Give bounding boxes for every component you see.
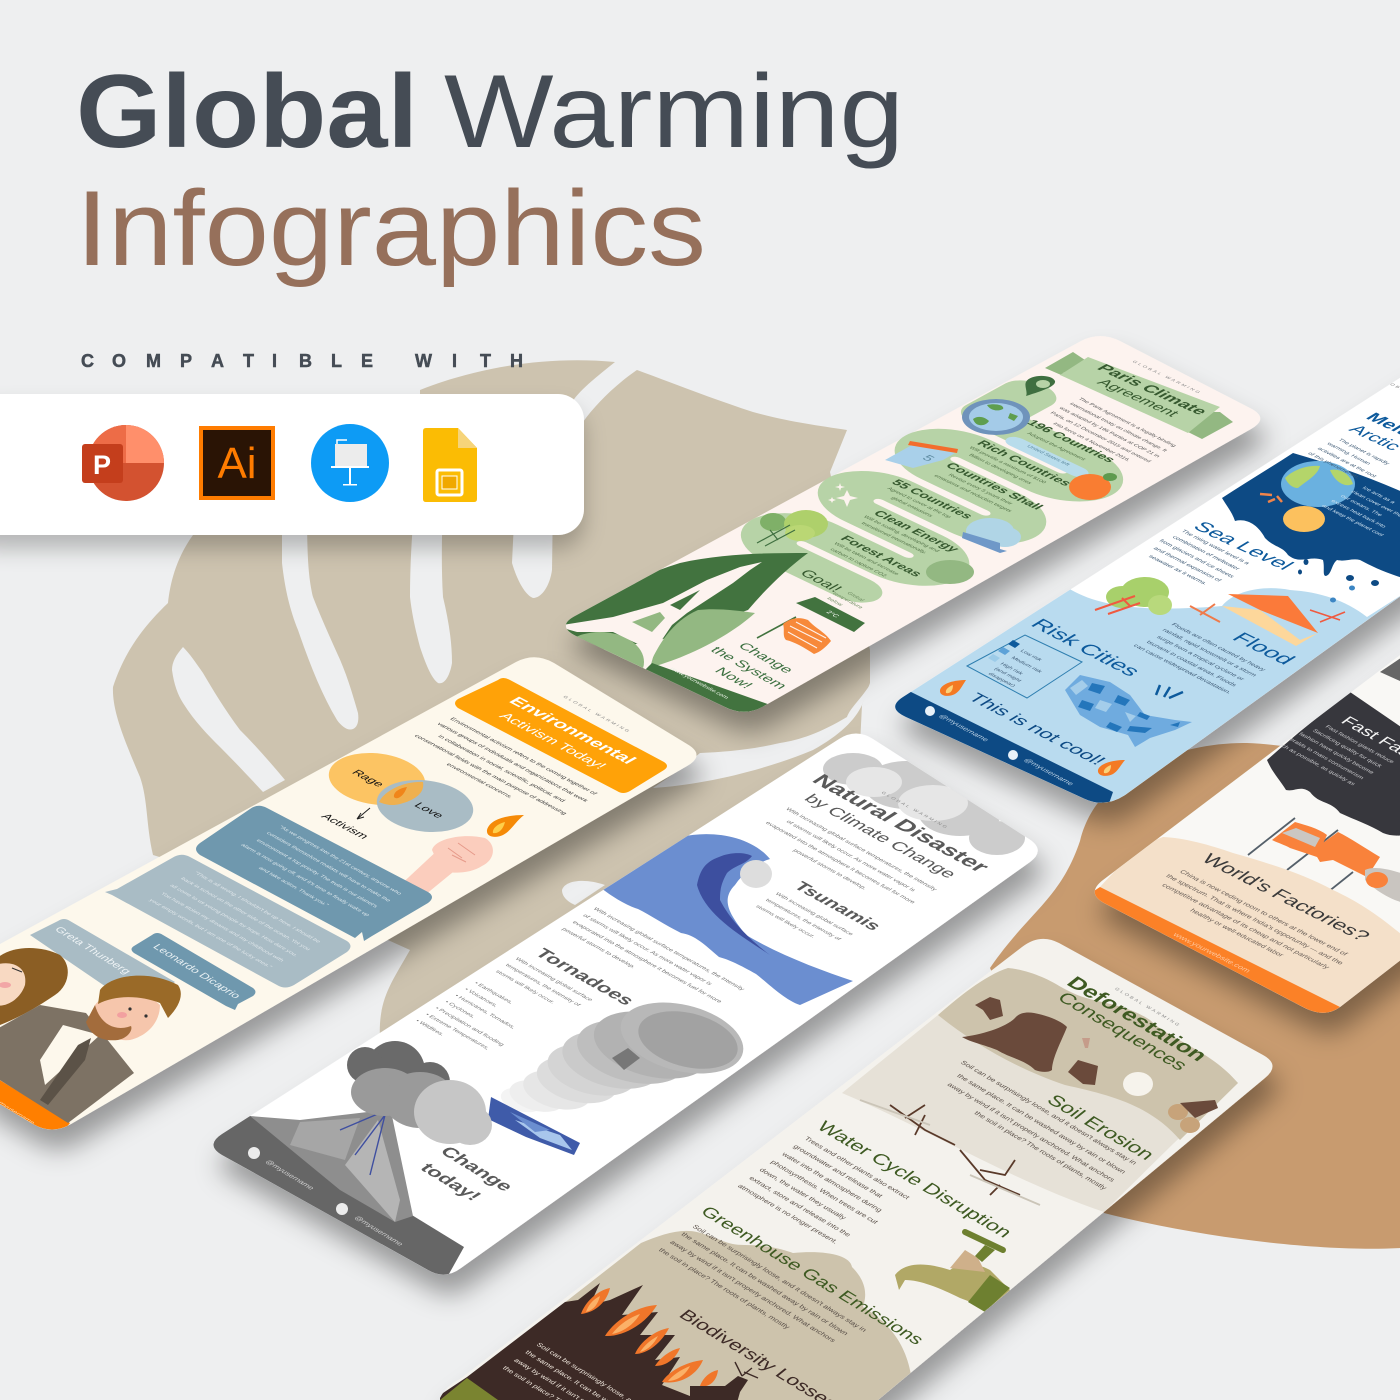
intro paragraph: The Paris Agreement is a legally binding bbox=[1076, 397, 1177, 448]
Risk Cities heading: Risk Cities bbox=[1026, 615, 1146, 679]
footer bar bbox=[895, 692, 1113, 803]
Tornadoes paragraph and list: • Volcanoes, bbox=[463, 988, 499, 1008]
Tsunamis heading: Tsunamis bbox=[790, 879, 886, 933]
2 degree banner: 2°C bbox=[824, 610, 841, 619]
quote bubble: Greta: You have stolen my dreams and my childhood with bbox=[159, 892, 285, 963]
title: Warming bbox=[444, 54, 904, 170]
Tornadoes paragraph and list: With increasing global surface bbox=[513, 957, 594, 1003]
Flood paragraph: tsunami in coastal areas. Floods bbox=[1145, 640, 1238, 688]
call to action: the System bbox=[707, 645, 790, 691]
quote bubble: Greta: all come to us young people for hope. How dare you. bbox=[168, 884, 299, 958]
section: Forest Areas: Forest Areas bbox=[837, 534, 926, 578]
pin icon bbox=[1025, 376, 1055, 396]
footer bar bbox=[1094, 887, 1340, 1013]
label: GLOBAL WARMING bbox=[1113, 987, 1182, 1028]
icon: waving orange flag bbox=[757, 617, 831, 654]
second paragraph: of storms will likely occur. As more water vapor is bbox=[581, 913, 714, 986]
Flood heading: Flood bbox=[1227, 629, 1301, 668]
Deforestation heading: Deforestation bbox=[1062, 973, 1213, 1065]
soil paragraph: Soil can be surprisingly loose, and it doesn't always stay in bbox=[959, 1060, 1138, 1166]
factories paragraph: healthy or well-educated labor bbox=[1188, 908, 1286, 958]
Environmental heading: Environmental bbox=[505, 694, 641, 766]
raised fist icon bbox=[395, 836, 493, 895]
greenhouse paragraph: away by wind if it isn't properly anchored. What anchors bbox=[668, 1239, 837, 1344]
tree icon bbox=[1095, 577, 1172, 615]
intro paragraph: various groups of individuals and organizations that work bbox=[435, 722, 590, 804]
decorative monstera leaf bbox=[113, 360, 871, 1040]
section: 196 Countries: United States left bbox=[1025, 444, 1071, 467]
section: Rich Countries: Will provide a minimum of $100 bbox=[967, 446, 1047, 484]
Natural Disaster heading: by Climate Change bbox=[800, 791, 961, 881]
footer bar bbox=[646, 663, 768, 712]
Sea Level heading: Sea Level bbox=[1188, 519, 1298, 573]
section: Goal: temperature bbox=[831, 592, 864, 610]
quote bubble: Greta bbox=[105, 855, 350, 988]
second paragraph: evaporated into the atmosphere it becomes fuel for more bbox=[570, 920, 724, 1004]
olive footer bbox=[440, 1378, 498, 1400]
dark blue melting shape bbox=[1222, 453, 1400, 583]
water paragraph: extract, store and release into the bbox=[747, 1175, 852, 1238]
Tsunamis paragraph: temperatures, the intensity of bbox=[764, 898, 842, 942]
flooded house icon bbox=[1222, 594, 1345, 646]
section: Clean Energy: Will be scaling, developing and bbox=[862, 515, 940, 553]
social handles: @myusername bbox=[263, 1158, 316, 1191]
intro paragraph bbox=[402, 715, 602, 822]
Greenhouse Gas Emissions heading: Greenhouse Gas Emissions bbox=[697, 1203, 928, 1348]
greenhouse paragraph bbox=[657, 1222, 868, 1358]
section: Rich Countries: Rich Countries bbox=[974, 438, 1075, 488]
section: Goal: Global bbox=[845, 592, 865, 602]
title: Infographics bbox=[76, 168, 706, 288]
decorative brown blob bbox=[990, 743, 1400, 1249]
second paragraph: powerful storms to develop. bbox=[560, 927, 637, 970]
title: Global bbox=[76, 54, 418, 170]
Sea Level paragraph: seawater as it warms. bbox=[1147, 554, 1209, 586]
Tsunamis paragraph bbox=[754, 892, 855, 949]
Fast Fashion paragraph: Sacrificing quality for quick bbox=[1311, 729, 1383, 769]
quote bubble: Greta: "This is all wrong. I shouldn't be up here. I should be bbox=[192, 871, 321, 944]
panel: software icons bbox=[0, 394, 584, 535]
quote bubble: Leonardo: and take action. Thank you." bbox=[257, 866, 329, 907]
Leo bbox=[86, 976, 181, 1040]
Sea Level paragraph: from glaciers and ice sheets bbox=[1157, 539, 1236, 579]
tornado illustration bbox=[493, 988, 767, 1118]
Change today slogan: today! bbox=[415, 1161, 485, 1204]
illustration: leaves and Eiffel Tower bbox=[566, 553, 808, 668]
call to action: Now! bbox=[711, 666, 756, 691]
tree stumps illustration bbox=[962, 997, 1218, 1133]
section: 55 Countries: Agreed to cover at the top bbox=[885, 487, 952, 519]
Arctic paragraph bbox=[1308, 438, 1390, 478]
panel: Natural Disaster card bbox=[190, 734, 1038, 1290]
risk legend: disappear) bbox=[986, 672, 1016, 688]
venn diagram: Activism bbox=[318, 812, 372, 841]
venn diagram bbox=[309, 742, 493, 843]
Flood paragraph: can cause widespread devastation. bbox=[1132, 643, 1233, 695]
earth icon bbox=[962, 399, 1030, 435]
Flood paragraph: Floods are often caused by heavy bbox=[1169, 622, 1268, 673]
water background bbox=[895, 588, 1400, 803]
Fast Fashion paragraph: much as possible, as quickly as bbox=[1272, 740, 1356, 787]
Flood paragraph: rainfall, rapid snowmelt or a storm bbox=[1160, 628, 1258, 678]
quote bubble: Greta: your empty words, but I am one of the lucky ones." bbox=[147, 898, 273, 969]
label: GLOBAL WARMING bbox=[879, 791, 950, 830]
intro paragraph: Environmental activism refers to the coming together of bbox=[448, 717, 598, 796]
factories paragraph: China is now ceding room to others at the lower end of bbox=[1178, 869, 1349, 957]
green snake path bbox=[755, 393, 1148, 600]
soil paragraph: the same place. It can be washed away by rain or blown bbox=[955, 1073, 1127, 1175]
water paragraph: Trees and other plants also extract bbox=[803, 1136, 911, 1201]
intro paragraph: Paris, on 12 December 2015 and entered bbox=[1048, 411, 1152, 463]
soil paragraph: the soil in place? The roots of plants, mostly bbox=[972, 1110, 1109, 1191]
panel: Paris Climate Agreement card bbox=[556, 336, 1260, 725]
water paragraph: atmosphere is no longer present. bbox=[736, 1183, 840, 1245]
quote bubble: Leonardo: "As we progress into the 21st century, anyone who bbox=[277, 825, 402, 896]
name label: Greta Thunberg: Greta Thunberg bbox=[52, 925, 133, 976]
icon: Illustrator bbox=[201, 428, 273, 498]
Arctic paragraph: of this phenomenon. bbox=[1306, 452, 1361, 480]
venn diagram: Rage bbox=[349, 768, 388, 789]
footer bar: @myusername bbox=[1022, 757, 1076, 787]
ice text on dark: Ice acts as a bbox=[1360, 486, 1397, 505]
grey top element bbox=[1380, 658, 1400, 681]
water paragraph: photosynthesis. When trees are cut bbox=[769, 1159, 880, 1225]
intro paragraph: into force on 4 November 2016. bbox=[1051, 422, 1132, 463]
earth and sun bbox=[1260, 461, 1355, 532]
Fast Fashion paragraph bbox=[1280, 725, 1394, 786]
intro paragraph: environmental concerns. bbox=[444, 762, 515, 800]
greenhouse paragraph: the soil in place? The roots of plants, mostly bbox=[657, 1247, 792, 1331]
water paragraph: groundwater and release that bbox=[791, 1143, 884, 1199]
intro paragraph: in collaboration in social, scientific, political, and bbox=[436, 734, 567, 803]
ground cracks bbox=[860, 1100, 1040, 1205]
venn diagram: Love bbox=[411, 801, 447, 820]
Tornadoes heading: Tornadoes bbox=[530, 946, 638, 1008]
Arctic paragraph: The planet is rapidly bbox=[1336, 438, 1391, 466]
water paragraph: down, the water they usually bbox=[758, 1167, 848, 1221]
section: 55 Countries: global emissions bbox=[889, 496, 934, 518]
Arctic paragraph: warming. Human bbox=[1324, 442, 1371, 466]
ribbon title banner: Paris Climate bbox=[1093, 362, 1212, 417]
section: Forest Areas: carbon to capture CO2. bbox=[828, 548, 889, 579]
label: GLOBAL WARMING bbox=[561, 695, 632, 734]
icon: Google Slides bbox=[423, 428, 477, 502]
icon: PowerPoint bbox=[82, 425, 164, 501]
section: Goal: below bbox=[825, 597, 845, 607]
quote bubble: Greta: back in school on the other side of the ocean. Yet you bbox=[179, 877, 311, 951]
section: 196 Countries: Adopted the Agreement bbox=[1025, 432, 1087, 462]
header clouds bbox=[823, 753, 1025, 855]
intro paragraph: international treaty on climate change. It bbox=[1068, 402, 1168, 453]
section: 55 Countries: 55 Countries bbox=[888, 477, 977, 521]
intro paragraph bbox=[1039, 396, 1179, 468]
intro paragraph: was adopted by 196 Parties at COP 21 in bbox=[1056, 406, 1161, 458]
water paragraph bbox=[736, 1133, 911, 1250]
Tornadoes paragraph and list: • Hurricanes, Tornados, bbox=[453, 994, 517, 1030]
volcano illustration bbox=[250, 1041, 492, 1222]
icon: Illustrator: Ai bbox=[217, 439, 257, 488]
Tornadoes paragraph and list: temperatures, the intensity of bbox=[504, 963, 581, 1007]
USA risk map bbox=[1065, 675, 1192, 747]
risk legend: Low risk bbox=[1018, 649, 1043, 662]
Tornadoes paragraph and list: • Precipitation and flooding bbox=[433, 1006, 505, 1047]
footer bar: www.yourwebsite.com bbox=[667, 667, 729, 700]
flame icon bbox=[487, 815, 524, 837]
footer bar: www.yourwebsite.com bbox=[1170, 931, 1252, 974]
Tornadoes paragraph and list: • Earthquakes, bbox=[473, 981, 514, 1005]
Fast Fashion paragraph: heralds to mass consumerism bbox=[1284, 736, 1364, 780]
panel: Fast Fashion card bbox=[1080, 640, 1400, 1030]
section: Clean Energy: Clean Energy bbox=[870, 508, 964, 554]
footer bar: @myusername bbox=[937, 713, 991, 743]
footer bar bbox=[0, 1068, 70, 1145]
icon: monstera leaf bbox=[926, 560, 974, 584]
icon: calendar bbox=[885, 441, 958, 468]
risk legend bbox=[967, 635, 1082, 698]
floating stick bbox=[1190, 604, 1220, 622]
Sea Level paragraph bbox=[1148, 529, 1249, 585]
soil paragraph: away by wind if it isn't properly anchored. What anchors bbox=[945, 1082, 1117, 1183]
Change today slogan: Change bbox=[435, 1144, 517, 1195]
dark oil drip bbox=[1267, 692, 1400, 836]
panel: Sea Level card bbox=[860, 365, 1400, 830]
Deforestation heading: Consequences bbox=[1053, 989, 1192, 1074]
quote bubble: Leonardo bbox=[196, 806, 432, 941]
name label: Leonardo Dicaprio: Leonardo Dicaprio bbox=[150, 943, 243, 1000]
compatible with heading: COMPATIBLE WITH bbox=[81, 351, 523, 371]
Tsunamis paragraph: With increasing global surface bbox=[773, 892, 855, 937]
intro paragraph: With increasing global surface temperatures, the intensity bbox=[784, 807, 939, 892]
name label: Greta Thunberg bbox=[30, 919, 175, 1010]
ice text on dark: and keep the planet cool bbox=[1320, 504, 1384, 537]
Sea Level paragraph: and thermal expansion of bbox=[1151, 546, 1223, 583]
footer bar bbox=[190, 1114, 464, 1290]
blue lava stream bbox=[488, 1097, 580, 1155]
World's Factories heading: World's Factories? bbox=[1197, 851, 1374, 944]
water paragraph: water into the atmosphere during bbox=[779, 1151, 884, 1213]
icon: broccoli tree bbox=[757, 510, 828, 546]
risk legend: (and might bbox=[992, 667, 1023, 683]
icon: PowerPoint: P bbox=[93, 450, 111, 480]
Flood paragraph: surge from a tropical cyclone or bbox=[1155, 635, 1246, 682]
Fast Fashion paragraph: fashion have quickly become bbox=[1297, 732, 1375, 776]
panel: Deforestation card bbox=[430, 939, 1273, 1400]
greenhouse paragraph: Soil can be surprisingly loose, and it doesn't always stay in bbox=[691, 1224, 868, 1333]
greenhouse paragraph: the same place. It can be washed away by rain or blown bbox=[679, 1231, 850, 1337]
Tornadoes paragraph and list: • Cyclones, bbox=[443, 1000, 476, 1019]
risk legend: High risk bbox=[998, 662, 1024, 676]
Sea Level paragraph: combination of meltwater bbox=[1171, 535, 1241, 571]
Sea Level paragraph: The rising water level is a bbox=[1179, 529, 1252, 566]
icon: piggy bank bbox=[1069, 473, 1117, 500]
Natural Disaster heading: Natural Disaster bbox=[807, 771, 995, 875]
quote bubble: Leonardo: alarm is now going off, and it's time to finally wake up bbox=[239, 843, 370, 917]
ice text on dark: our oceans. The bbox=[1339, 494, 1383, 517]
flags illustration bbox=[1248, 818, 1400, 905]
second paragraph bbox=[560, 907, 747, 1012]
suits bbox=[0, 1005, 134, 1123]
factories paragraph: the spectrum. That is where India's opportunity — and the bbox=[1164, 873, 1345, 966]
drops bbox=[1298, 559, 1379, 602]
section: Countries Shall: emissions and reduction targets bbox=[932, 474, 1013, 513]
name label: Leonardo Dicaprio bbox=[132, 933, 256, 1010]
ice text on dark: excess heat back into bbox=[1329, 499, 1387, 529]
Water Cycle Disruption heading: Water Cycle Disruption bbox=[812, 1118, 1016, 1241]
quote bubble: Leonardo: considers themselves realists will have to make the bbox=[265, 831, 392, 903]
faucet illustration bbox=[895, 1232, 1010, 1315]
portraits bbox=[0, 948, 181, 1123]
ice text on dark bbox=[1320, 483, 1400, 537]
This is not cool slogan: This is not cool! bbox=[963, 690, 1110, 768]
intro paragraph: evaporated into the atmosphere it becomes fuel for more bbox=[764, 821, 917, 905]
flames in forest bbox=[581, 1288, 718, 1386]
intro paragraph: powerful storms to develop. bbox=[791, 848, 868, 891]
intro paragraph: conservational fields with the main purpose of addressing bbox=[413, 734, 569, 816]
risk legend: Medium risk bbox=[1009, 656, 1043, 674]
section: Goal: Goal! bbox=[796, 568, 845, 594]
Soil Erosion heading: Soil Erosion bbox=[1042, 1092, 1158, 1163]
ribbon title banner bbox=[1045, 352, 1233, 439]
section: Forest Areas: Will be taken and increase bbox=[832, 542, 900, 576]
section: Rich Countries: Billion to developing ones bbox=[967, 453, 1033, 485]
second paragraph: With increasing global surface temperatures, the intensity bbox=[591, 907, 747, 992]
Tornadoes paragraph and list: storms will likely occur. bbox=[494, 970, 556, 1005]
intro paragraph: of storms will likely occur. As more water vapor is bbox=[784, 819, 917, 893]
ribbon title banner: Agreement bbox=[1093, 377, 1183, 419]
Tornadoes paragraph and list bbox=[414, 956, 594, 1066]
tan top section bbox=[938, 968, 1238, 1140]
Flood paragraph bbox=[1132, 621, 1269, 695]
title bbox=[76, 54, 904, 288]
call to action: Change bbox=[734, 641, 796, 675]
ribbon title banner: GLOBAL WARMING bbox=[1130, 360, 1203, 395]
icon: calendar: 5 bbox=[919, 453, 938, 463]
lower tan cloud bbox=[440, 1231, 911, 1400]
soil strip bbox=[842, 968, 1238, 1212]
orange header bbox=[455, 678, 667, 793]
tan arched section bbox=[1100, 837, 1400, 1010]
social handles: @myusername bbox=[352, 1214, 405, 1247]
Change today slogan bbox=[415, 1144, 517, 1204]
icon: sparkles bbox=[828, 483, 858, 507]
Fast Fashion paragraph: Fast fashion giants reduce bbox=[1324, 725, 1395, 765]
section: Countries Shall: Revise every 5 years their bbox=[946, 473, 1014, 506]
flames bbox=[940, 680, 1125, 776]
Environmental heading: Activism Today! bbox=[495, 711, 610, 771]
Tornadoes paragraph and list: • Extreme Temperatures, bbox=[424, 1013, 491, 1051]
quote bubble: Leonardo: environment a top priority. The truth is our planet's bbox=[254, 839, 379, 909]
intro paragraph bbox=[752, 807, 939, 913]
2 degree banner bbox=[796, 597, 865, 632]
Tornadoes paragraph and list: • Wildfires. bbox=[414, 1019, 445, 1037]
tsunami wave bbox=[601, 834, 853, 1005]
Greta bbox=[0, 948, 68, 1025]
deer silhouette bbox=[690, 1362, 758, 1400]
section: Clean Energy: transitioned internationally. bbox=[859, 522, 928, 555]
Tsunamis paragraph: storms will likely occur. bbox=[754, 905, 816, 939]
icon: factory smoke bbox=[962, 518, 1021, 553]
factories paragraph: competitive advantage of its cheap and not particularly bbox=[1160, 882, 1331, 970]
panel: Environmental Activism card bbox=[0, 657, 696, 1145]
light blue pill bbox=[1001, 435, 1093, 479]
Melting Arctic heading bbox=[1348, 384, 1400, 450]
section: Countries Shall: Countries Shall bbox=[942, 461, 1047, 511]
Arctic paragraph: activities are at the root bbox=[1316, 447, 1378, 479]
social handles bbox=[248, 1147, 405, 1247]
icon: Keynote bbox=[311, 424, 389, 502]
section: Goal bbox=[788, 568, 873, 614]
dark burning forest bbox=[430, 1283, 715, 1400]
section: 196 Countries: 196 Countries bbox=[1024, 418, 1119, 464]
